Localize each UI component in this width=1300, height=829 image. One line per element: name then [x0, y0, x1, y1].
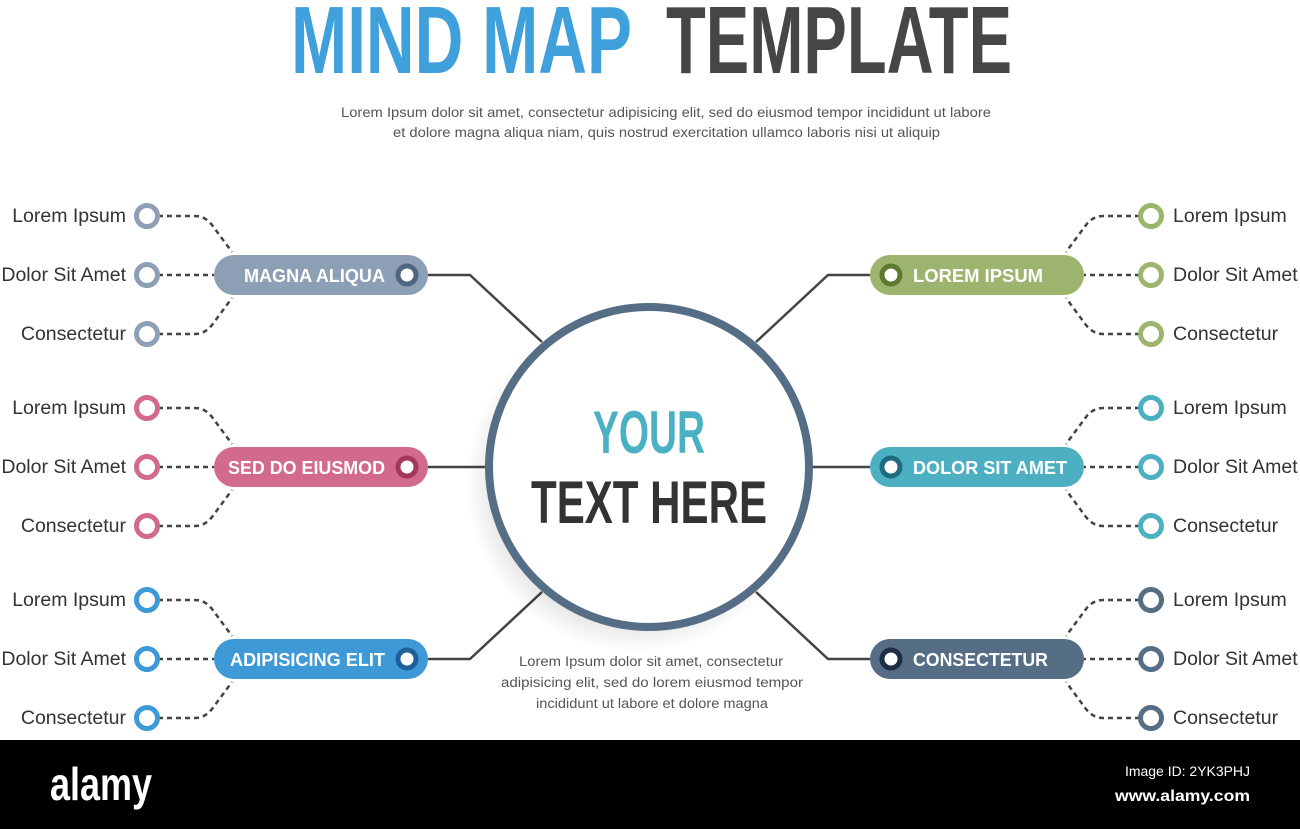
branch: dolor sit amet: DOLOR SIT AMET — [913, 458, 1067, 478]
footer bar: www.alamy.com — [1114, 788, 1250, 805]
center description: Lorem Ipsum dolor sit amet, consectetur — [519, 654, 784, 669]
title — [291, 0, 1012, 94]
branch: consectetur: Dolor Sit Amet — [1173, 648, 1298, 670]
branch: magna aliqua: Consectetur — [21, 323, 127, 345]
center description: incididunt ut labore et dolore magna — [536, 696, 769, 711]
center circle — [466, 307, 809, 652]
branch: consectetur — [870, 589, 1298, 729]
branch: lorem ipsum: Lorem Ipsum — [1173, 205, 1287, 227]
branch: consectetur: CONSECTETUR — [913, 650, 1048, 670]
branch: adipisicing elit: Consectetur — [21, 707, 127, 729]
branch: adipisicing elit: ADIPISICING ELIT — [230, 650, 385, 670]
subtitle: et dolore magna aliqua niam, quis nostrud exercitation ullamco laboris nisi ut aliquip — [393, 124, 940, 140]
footer bar: Image ID: 2YK3PHJ — [1125, 763, 1250, 779]
branch: dolor sit amet: Lorem Ipsum — [1173, 397, 1287, 419]
branch: dolor sit amet: Dolor Sit Amet — [1173, 456, 1298, 478]
branch: consectetur: Lorem Ipsum — [1173, 589, 1287, 611]
center circle: TEXT HERE — [531, 469, 767, 536]
center description — [501, 654, 804, 711]
subtitle — [341, 104, 991, 140]
footer bar: alamy — [50, 758, 152, 810]
branch: dolor sit amet: Consectetur — [1173, 515, 1279, 537]
footer bar — [0, 740, 1300, 829]
branch: lorem ipsum: Dolor Sit Amet — [1173, 264, 1298, 286]
branch: adipisicing elit — [1, 589, 428, 729]
connectors to center — [428, 275, 870, 659]
branch: sed do eiusmod: Lorem Ipsum — [12, 397, 126, 419]
branch: sed do eiusmod — [1, 397, 428, 537]
center circle: YOUR — [593, 399, 705, 466]
branch: lorem ipsum: Consectetur — [1173, 323, 1279, 345]
branch: dolor sit amet — [870, 397, 1298, 537]
branch: magna aliqua: Lorem Ipsum — [12, 205, 126, 227]
branch: magna aliqua: Dolor Sit Amet — [1, 264, 127, 286]
branch: sed do eiusmod: Consectetur — [21, 515, 127, 537]
branch: magna aliqua — [1, 205, 428, 345]
branch: adipisicing elit: Dolor Sit Amet — [1, 648, 127, 670]
center description: adipisicing elit, sed do lorem eiusmod tempor — [501, 675, 804, 690]
branch: magna aliqua: MAGNA ALIQUA — [244, 266, 385, 286]
branch: sed do eiusmod: Dolor Sit Amet — [1, 456, 127, 478]
branch: adipisicing elit: Lorem Ipsum — [12, 589, 126, 611]
branch: lorem ipsum — [870, 205, 1298, 345]
branch: consectetur: Consectetur — [1173, 707, 1279, 729]
branch: sed do eiusmod: SED DO EIUSMOD — [228, 458, 385, 478]
branch: lorem ipsum: LOREM IPSUM — [913, 266, 1043, 286]
subtitle: Lorem Ipsum dolor sit amet, consectetur adipisicing elit, sed do eiusmod tempor incididunt ut labore — [341, 104, 991, 120]
